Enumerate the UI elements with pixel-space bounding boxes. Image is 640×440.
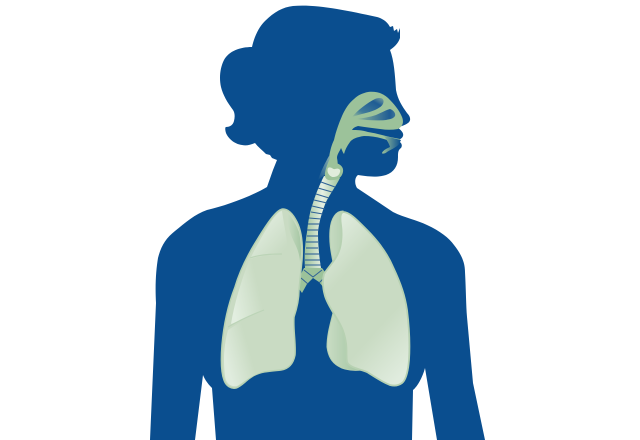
- icon: upper nasal passage: [352, 98, 384, 117]
- medial lobe shading: [288, 213, 301, 262]
- lower lobe highlight: [224, 312, 264, 386]
- trachea rings: [304, 182, 335, 265]
- left lung in image: [221, 209, 302, 388]
- icon: lower nasal passage: [357, 109, 395, 120]
- nasal airway and throat: [326, 92, 403, 170]
- larynx highlight: [327, 167, 340, 177]
- bronchi: [297, 268, 328, 293]
- trachea: [297, 176, 340, 293]
- upper lobe highlight: [250, 211, 288, 259]
- right lung in image: [323, 211, 409, 386]
- middle lobe highlight: [231, 258, 280, 324]
- front lobe: [323, 212, 409, 386]
- back lobe: [327, 211, 362, 370]
- icon: throat airflow shading: [318, 156, 336, 180]
- icon: oral cavity shading: [382, 136, 401, 154]
- larynx: [325, 158, 343, 180]
- body silhouette: [150, 6, 485, 440]
- lobe fissures: [228, 254, 282, 327]
